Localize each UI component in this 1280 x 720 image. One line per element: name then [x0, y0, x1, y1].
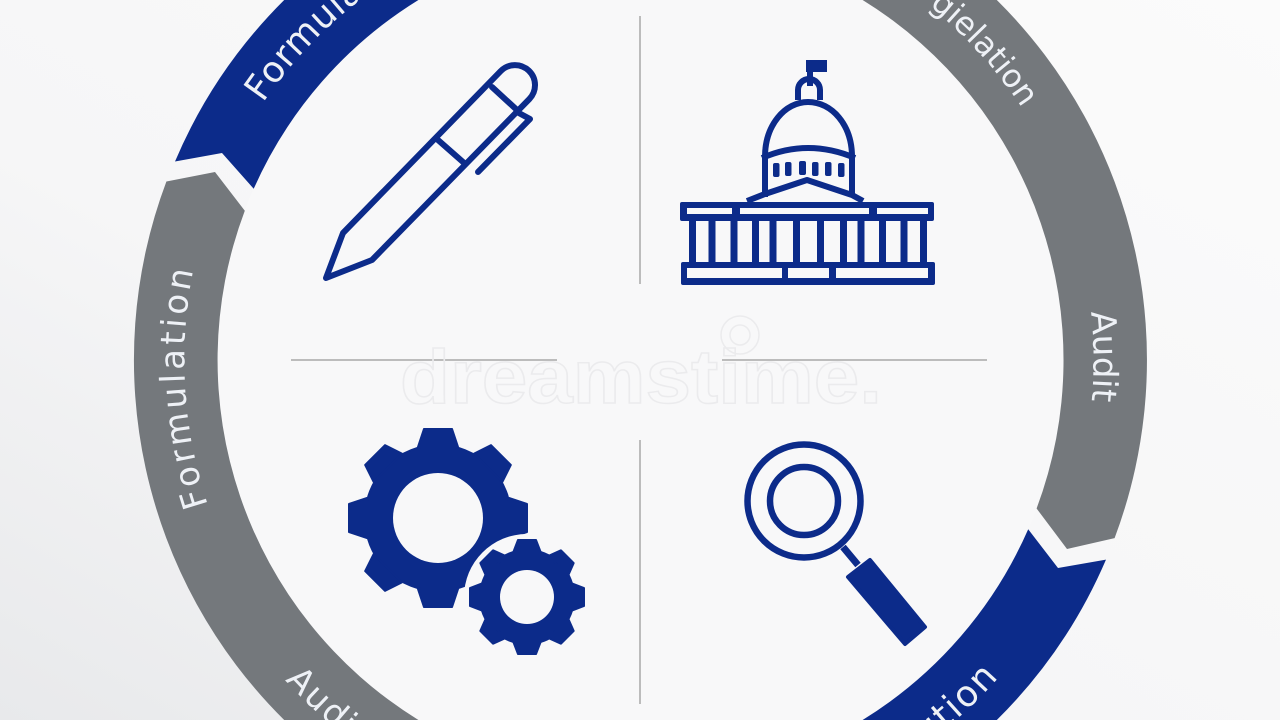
ring segment: left grey arrow — [134, 172, 418, 720]
large gear — [349, 429, 527, 607]
icon: capitol building — [680, 60, 935, 285]
watermark: dreamstime. — [400, 335, 882, 420]
ring segment: bottom-right blue arrow — [862, 529, 1106, 720]
icon: magnifying glass — [748, 444, 925, 644]
icon: gears — [349, 429, 590, 660]
label: Formulation: Formulation — [158, 271, 207, 510]
label: Audit: Audit — [1091, 312, 1120, 402]
ring segment: top-left blue arrow — [175, 0, 418, 189]
icon: pen — [326, 65, 535, 278]
ring segment: right grey arrow — [862, 0, 1147, 549]
small gear — [470, 540, 584, 654]
